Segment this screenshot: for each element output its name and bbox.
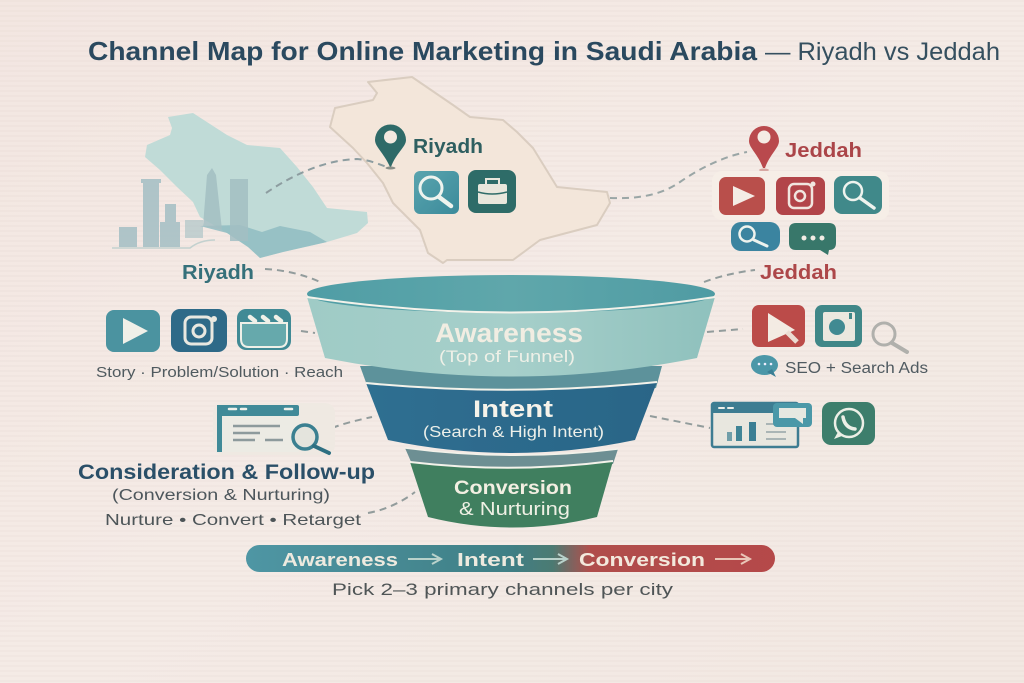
connectors: labels and icons to funnel xyxy=(265,269,755,513)
icon: video tile xyxy=(719,177,765,215)
icon: speech bubble xyxy=(751,355,778,377)
icon: instagram tile xyxy=(776,177,825,215)
icon: instagram tile xyxy=(171,309,227,352)
icon: analytics dashboard xyxy=(712,403,812,447)
title: Channel Map for Online Marketing in Saudi Arabia xyxy=(88,36,758,66)
icon: briefcase tile xyxy=(468,170,516,213)
flow bar: Awareness xyxy=(282,550,398,570)
icon: Riyadh pin xyxy=(375,124,406,170)
funnel: intent stage: Intent xyxy=(473,396,553,423)
icon: camera tile xyxy=(815,305,862,347)
funnel: awareness stage: Awareness xyxy=(435,318,583,348)
funnel: awareness stage xyxy=(307,275,715,376)
arrow xyxy=(408,554,441,564)
awareness channel icons right xyxy=(751,305,907,377)
funnel: intent stage xyxy=(366,382,657,453)
icon: search tile xyxy=(834,176,882,214)
footer note: Pick 2–3 primary channels per city xyxy=(332,580,674,599)
icon: play tile xyxy=(106,310,160,352)
funnel: awareness stage: (Top of Funnel) xyxy=(439,347,575,366)
title xyxy=(88,36,1000,66)
icon: clapperboard tile xyxy=(237,309,291,350)
icon: WhatsApp tile xyxy=(822,402,875,445)
arrow xyxy=(533,554,567,564)
icon: video cursor tile xyxy=(752,305,805,347)
consideration tactics text: Nurture • Convert • Retarget xyxy=(105,512,362,529)
flow bar: Intent xyxy=(457,550,524,570)
funnel xyxy=(307,275,715,528)
connector: map to Jeddah pin xyxy=(610,152,747,198)
awareness tactics text: Story · Problem/Solution · Reach xyxy=(96,365,343,381)
icon: grey search xyxy=(873,323,907,352)
consideration subheading: (Conversion & Nurturing) xyxy=(112,487,330,504)
icon: search ads tile xyxy=(731,222,780,251)
funnel: connector band one xyxy=(360,366,662,394)
flow bar: Conversion xyxy=(579,550,705,570)
icon: Jeddah pin xyxy=(749,126,779,172)
cream Saudi map xyxy=(330,77,610,263)
funnel: conversion stage: Conversion xyxy=(454,478,572,499)
consideration heading: Consideration & Follow-up xyxy=(78,461,375,484)
funnel: conversion stage xyxy=(405,448,618,528)
Riyadh map label: Riyadh xyxy=(413,136,483,158)
teal map with Riyadh skyline xyxy=(112,113,368,258)
icon: search tile xyxy=(414,171,459,214)
awareness channel icons left xyxy=(106,309,291,352)
arrow xyxy=(715,554,750,564)
title: — Riyadh vs Jeddah xyxy=(765,38,1000,66)
funnel: intent stage: (Search & High Intent) xyxy=(423,424,604,441)
connector: map to Riyadh pin xyxy=(266,159,387,193)
icon: chat tile xyxy=(789,223,836,255)
Riyadh funnel label: Riyadh xyxy=(182,262,254,284)
icon: search window xyxy=(213,403,335,455)
Jeddah map label: Jeddah xyxy=(785,140,862,162)
funnel: connector band two xyxy=(405,448,618,470)
flow bar xyxy=(246,545,775,572)
infographic artwork xyxy=(78,36,1000,599)
Jeddah funnel label: Jeddah xyxy=(760,262,837,284)
SEO label: SEO + Search Ads xyxy=(785,360,928,377)
funnel: conversion stage: & Nurturing xyxy=(459,499,570,519)
Jeddah map channel icons xyxy=(712,171,889,255)
